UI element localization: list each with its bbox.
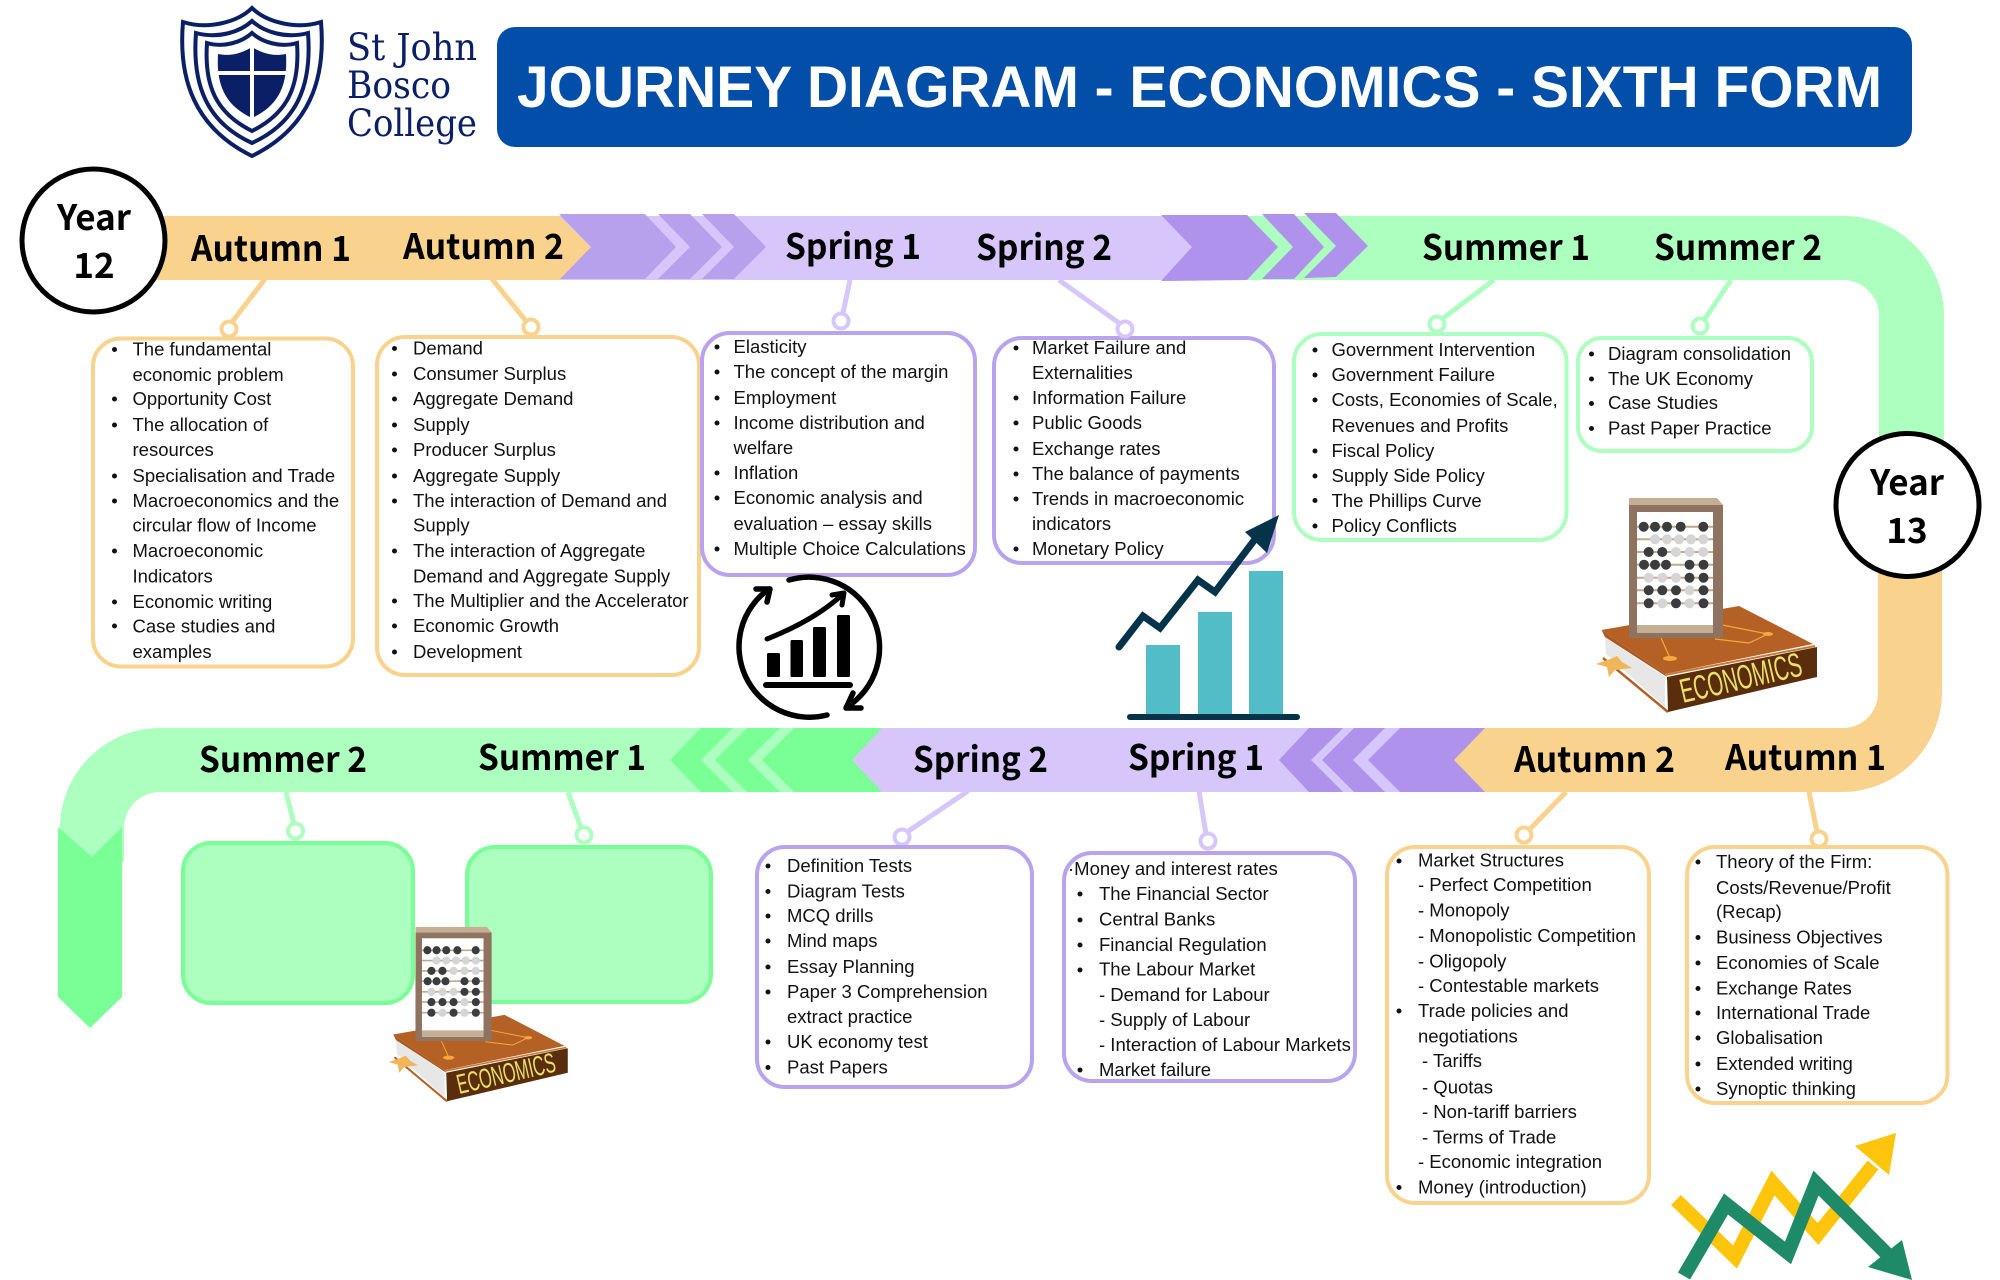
badge: Year 13 <box>1836 434 1979 576</box>
panel: Year 13 Spring 2 topics <box>757 791 1032 1087</box>
topic list: economic problem <box>132 364 284 385</box>
topic list: Business Objectives <box>1716 926 1883 948</box>
topic list: Macroeconomic <box>132 540 263 561</box>
topic list: The interaction of Demand and <box>413 490 667 511</box>
topic list: indicators <box>1032 513 1111 534</box>
topic list: examples <box>132 641 212 662</box>
topic list: - Interaction of Labour Markets <box>1099 1034 1351 1055</box>
chevrons: autumn to spring <box>559 214 766 279</box>
connector <box>1430 280 1494 332</box>
topic list: Exchange rates <box>1032 438 1161 459</box>
topic list: Economies of Scale <box>1716 952 1880 973</box>
band: summer with corner <box>1240 216 1944 445</box>
icon: rising bar chart with arrow <box>1119 515 1300 720</box>
topic list: resources <box>132 439 214 460</box>
label: Spring 1: Spring 1 <box>1128 730 1264 781</box>
topic list: The Financial Sector <box>1099 883 1269 904</box>
topic list: Globalisation <box>1716 1027 1823 1048</box>
topic list: Synoptic thinking <box>1716 1078 1856 1099</box>
topic list: Policy Conflicts <box>1332 515 1457 536</box>
label: Summer 1: Summer 1 <box>1422 220 1590 271</box>
topic list: (Recap) <box>1716 901 1782 922</box>
connector <box>1692 280 1731 334</box>
card frame <box>702 333 975 575</box>
card frame <box>1687 847 1948 1103</box>
topic list: Opportunity Cost <box>132 388 271 409</box>
label: Autumn 1: Autumn 1 <box>190 221 351 272</box>
topic list: The Labour Market <box>1099 958 1255 980</box>
abacus <box>415 927 492 1041</box>
topic list: Trade policies and <box>1418 1000 1568 1021</box>
topic list: - Perfect Competition <box>1418 874 1592 895</box>
panel: Year 12 Summer 1 topics <box>1294 280 1566 540</box>
label: Autumn 2: Autumn 2 <box>402 219 564 270</box>
panel: Year 12 Autumn 2 topics <box>377 279 699 675</box>
topic list: Demand <box>413 338 483 358</box>
panel: Year 12 Autumn 1 topics <box>93 279 353 666</box>
card frame <box>1387 847 1649 1203</box>
topic list: The balance of payments <box>1032 463 1240 484</box>
badge: Year 13: 13 <box>1886 503 1928 554</box>
topic list: The allocation of <box>132 414 269 435</box>
connector <box>568 792 592 842</box>
topic list: Specialisation and Trade <box>132 465 335 486</box>
school name: College <box>347 102 477 145</box>
badge: Year 12: Year <box>56 190 132 241</box>
topic list <box>1399 850 1636 1198</box>
badge: Year 13: Year <box>1869 455 1945 506</box>
topic list: Past Papers <box>787 1056 888 1078</box>
panel: Year 13 Autumn 1 topics <box>1687 792 1948 1103</box>
card <box>183 843 413 1003</box>
card frame <box>93 338 353 666</box>
topic list: - Oligopoly <box>1418 950 1507 972</box>
topic list: Costs, Economies of Scale, <box>1332 389 1558 410</box>
topic list <box>1068 858 1351 1080</box>
card frame <box>1578 338 1812 451</box>
connector <box>492 279 538 334</box>
topic list: Market Structures <box>1418 850 1564 870</box>
topic list: ·Money and interest rates <box>1068 858 1278 879</box>
title banner <box>497 27 1912 147</box>
connector <box>834 280 850 328</box>
icon: circular growth chart <box>739 577 880 717</box>
topic list: The interaction of Aggregate <box>413 540 645 561</box>
band: autumn <box>130 216 591 280</box>
icon: school shield <box>182 8 322 156</box>
topic list: - Quotas <box>1422 1076 1493 1098</box>
topic list: Trends in macroeconomic <box>1032 488 1244 509</box>
title banner: JOURNEY DIAGRAM - ECONOMICS - SIXTH FORM <box>517 55 1882 120</box>
card frame <box>1294 334 1566 540</box>
card frame <box>757 847 1032 1087</box>
topic list: Diagram Tests <box>787 880 905 902</box>
connector <box>222 279 265 336</box>
book: ECONOMICS <box>1676 646 1806 711</box>
topic list: Costs/Revenue/Profit <box>1716 877 1891 898</box>
chevrons: autumn to spring <box>1279 728 1490 792</box>
topic list: Consumer Surplus <box>413 363 566 384</box>
topic list: Elasticity <box>734 336 807 357</box>
topic list: - Demand for Labour <box>1099 984 1270 1005</box>
topic list: Macroeconomics and the <box>132 490 339 511</box>
topic list: Inflation <box>734 462 798 483</box>
topic list: Economic analysis and <box>734 487 923 508</box>
badge: Year 12: 12 <box>73 238 115 289</box>
topic list: Aggregate Supply <box>413 465 561 486</box>
connector <box>286 792 303 838</box>
band: summer with corner <box>60 728 810 862</box>
topic list: Aggregate Demand <box>413 388 573 409</box>
topic list: Diagram consolidation <box>1608 343 1791 364</box>
topic list: Multiple Choice Calculations <box>734 538 966 559</box>
topic list: UK economy test <box>787 1031 928 1052</box>
topic list: extract practice <box>787 1006 912 1027</box>
card frame <box>994 338 1274 563</box>
topic list: - Supply of Labour <box>1099 1009 1250 1030</box>
topic list: Information Failure <box>1032 387 1186 408</box>
topic list: Market failure <box>1099 1059 1211 1080</box>
topic list: Exchange Rates <box>1716 978 1852 998</box>
panel: Year 13 Autumn 2 topics <box>1387 792 1649 1203</box>
label: Summer 2: Summer 2 <box>199 732 367 783</box>
topic list <box>1698 851 1891 1099</box>
topic list: Market Failure and <box>1032 337 1186 358</box>
topic list: MCQ drills <box>787 905 873 926</box>
topic list <box>1592 343 1791 438</box>
topic list: Monetary Policy <box>1032 538 1164 559</box>
topic list: Economic writing <box>132 591 272 612</box>
card <box>467 847 711 1002</box>
panel: Year 12 Spring 1 topics <box>702 280 975 575</box>
book: ECONOMICS <box>454 1047 558 1100</box>
logo: St John Bosco College <box>182 8 477 156</box>
topic list: Indicators <box>132 566 213 586</box>
abacus <box>1629 498 1723 638</box>
panel: Year 12 Summer 2 topics <box>1578 280 1812 451</box>
topic list: evaluation – essay skills <box>734 513 932 534</box>
chevrons: spring to summer <box>670 728 882 792</box>
topic list: Case studies and <box>132 616 275 636</box>
topic list <box>114 338 339 662</box>
topic list: The Phillips Curve <box>1332 490 1482 511</box>
topic list: circular flow of Income <box>132 514 317 536</box>
label: Summer 1: Summer 1 <box>478 730 646 781</box>
topic list: welfare <box>732 437 793 458</box>
topic list: Case Studies <box>1608 392 1718 413</box>
topic list: Past Paper Practice <box>1608 418 1772 438</box>
topic list: Government Intervention <box>1332 339 1535 360</box>
topic list: Government Failure <box>1332 364 1495 385</box>
topic list <box>768 855 988 1078</box>
topic list: Extended writing <box>1716 1053 1853 1074</box>
topic list: Employment <box>734 387 836 408</box>
topic list: Money (introduction) <box>1418 1176 1587 1198</box>
label: Spring 1: Spring 1 <box>785 219 921 270</box>
topic list: Fiscal Policy <box>1332 440 1435 461</box>
topic list: Mind maps <box>787 930 877 951</box>
topic list: Definition Tests <box>787 855 912 876</box>
journey ribbon: Year 13 lower track <box>58 560 1942 1028</box>
topic list <box>1016 337 1244 559</box>
topic list: - Monopolistic Competition <box>1418 925 1636 946</box>
panel: Year 13 Summer 2 empty card <box>183 792 413 1003</box>
topic list: Income distribution and <box>734 412 925 433</box>
label: Autumn 2: Autumn 2 <box>1513 732 1675 783</box>
topic list: Central Banks <box>1099 908 1215 930</box>
icon: abacus on economics book <box>1596 498 1817 712</box>
badge: Year 12 <box>22 169 165 312</box>
card frame <box>1064 853 1355 1081</box>
connector <box>1516 792 1566 842</box>
panel: Year 13 Summer 1 empty card <box>467 792 711 1002</box>
band: autumn with corner <box>1454 560 1942 792</box>
topic list: Economic Growth <box>413 615 559 636</box>
topic list: The Multiplier and the Accelerator <box>413 590 689 611</box>
topic list: Theory of the Firm: <box>1716 851 1872 872</box>
icon: abacus on economics book (lower) <box>389 927 568 1101</box>
label: Autumn 1: Autumn 1 <box>1724 730 1886 781</box>
card frame <box>377 337 699 675</box>
topic list: - Economic integration <box>1418 1151 1602 1172</box>
book <box>389 1015 568 1101</box>
connector <box>1199 791 1216 848</box>
topic list: Demand and Aggregate Supply <box>413 566 671 586</box>
band: spring <box>559 216 1199 280</box>
school name <box>347 26 477 145</box>
topic list <box>717 336 966 559</box>
topic list: - Monopoly <box>1418 900 1510 920</box>
topic list: Essay Planning <box>787 956 915 977</box>
icon: rising and falling zigzag arrows <box>1676 1133 1912 1280</box>
topic list: Financial Regulation <box>1099 934 1267 955</box>
book <box>1596 606 1817 712</box>
topic list: - Terms of Trade <box>1422 1126 1556 1148</box>
chevrons: spring to summer <box>1161 213 1368 281</box>
topic list: Paper 3 Comprehension <box>787 981 988 1002</box>
panel: Year 13 Spring 1 topics <box>1064 791 1355 1081</box>
panel: Year 12 Spring 2 topics <box>994 280 1274 563</box>
label: Spring 2: Spring 2 <box>913 732 1048 783</box>
topic list: negotiations <box>1418 1026 1518 1046</box>
connector <box>1059 280 1132 336</box>
topic list: - Non-tariff barriers <box>1422 1101 1577 1122</box>
topic list: International Trade <box>1716 1002 1870 1023</box>
journey ribbon: Year 12 upper track <box>130 213 1944 445</box>
topic list: Supply <box>413 514 470 536</box>
topic list: Supply <box>413 414 470 435</box>
topic list: - Tariffs <box>1422 1050 1482 1071</box>
topic list: Public Goods <box>1032 412 1142 433</box>
label: Summer 2: Summer 2 <box>1654 220 1822 271</box>
school name: St John <box>347 26 477 69</box>
topic list: The concept of the margin <box>734 361 948 382</box>
topic list: Supply Side Policy <box>1332 465 1485 486</box>
label: Spring 2: Spring 2 <box>976 220 1112 271</box>
topic list: - Contestable markets <box>1418 975 1599 996</box>
connector <box>1809 792 1826 846</box>
connector <box>894 791 968 844</box>
band: spring <box>845 728 1415 792</box>
topic list: The UK Economy <box>1608 368 1754 389</box>
school name: Bosco <box>347 64 451 107</box>
topic list: Externalities <box>1032 362 1133 383</box>
topic list <box>1315 339 1558 536</box>
arrow: journey end <box>58 827 122 1028</box>
topic list: Revenues and Profits <box>1332 415 1508 436</box>
topic list: The fundamental <box>132 338 271 360</box>
topic list: Producer Surplus <box>413 439 556 460</box>
topic list: Development <box>413 641 522 662</box>
topic list <box>394 338 689 662</box>
